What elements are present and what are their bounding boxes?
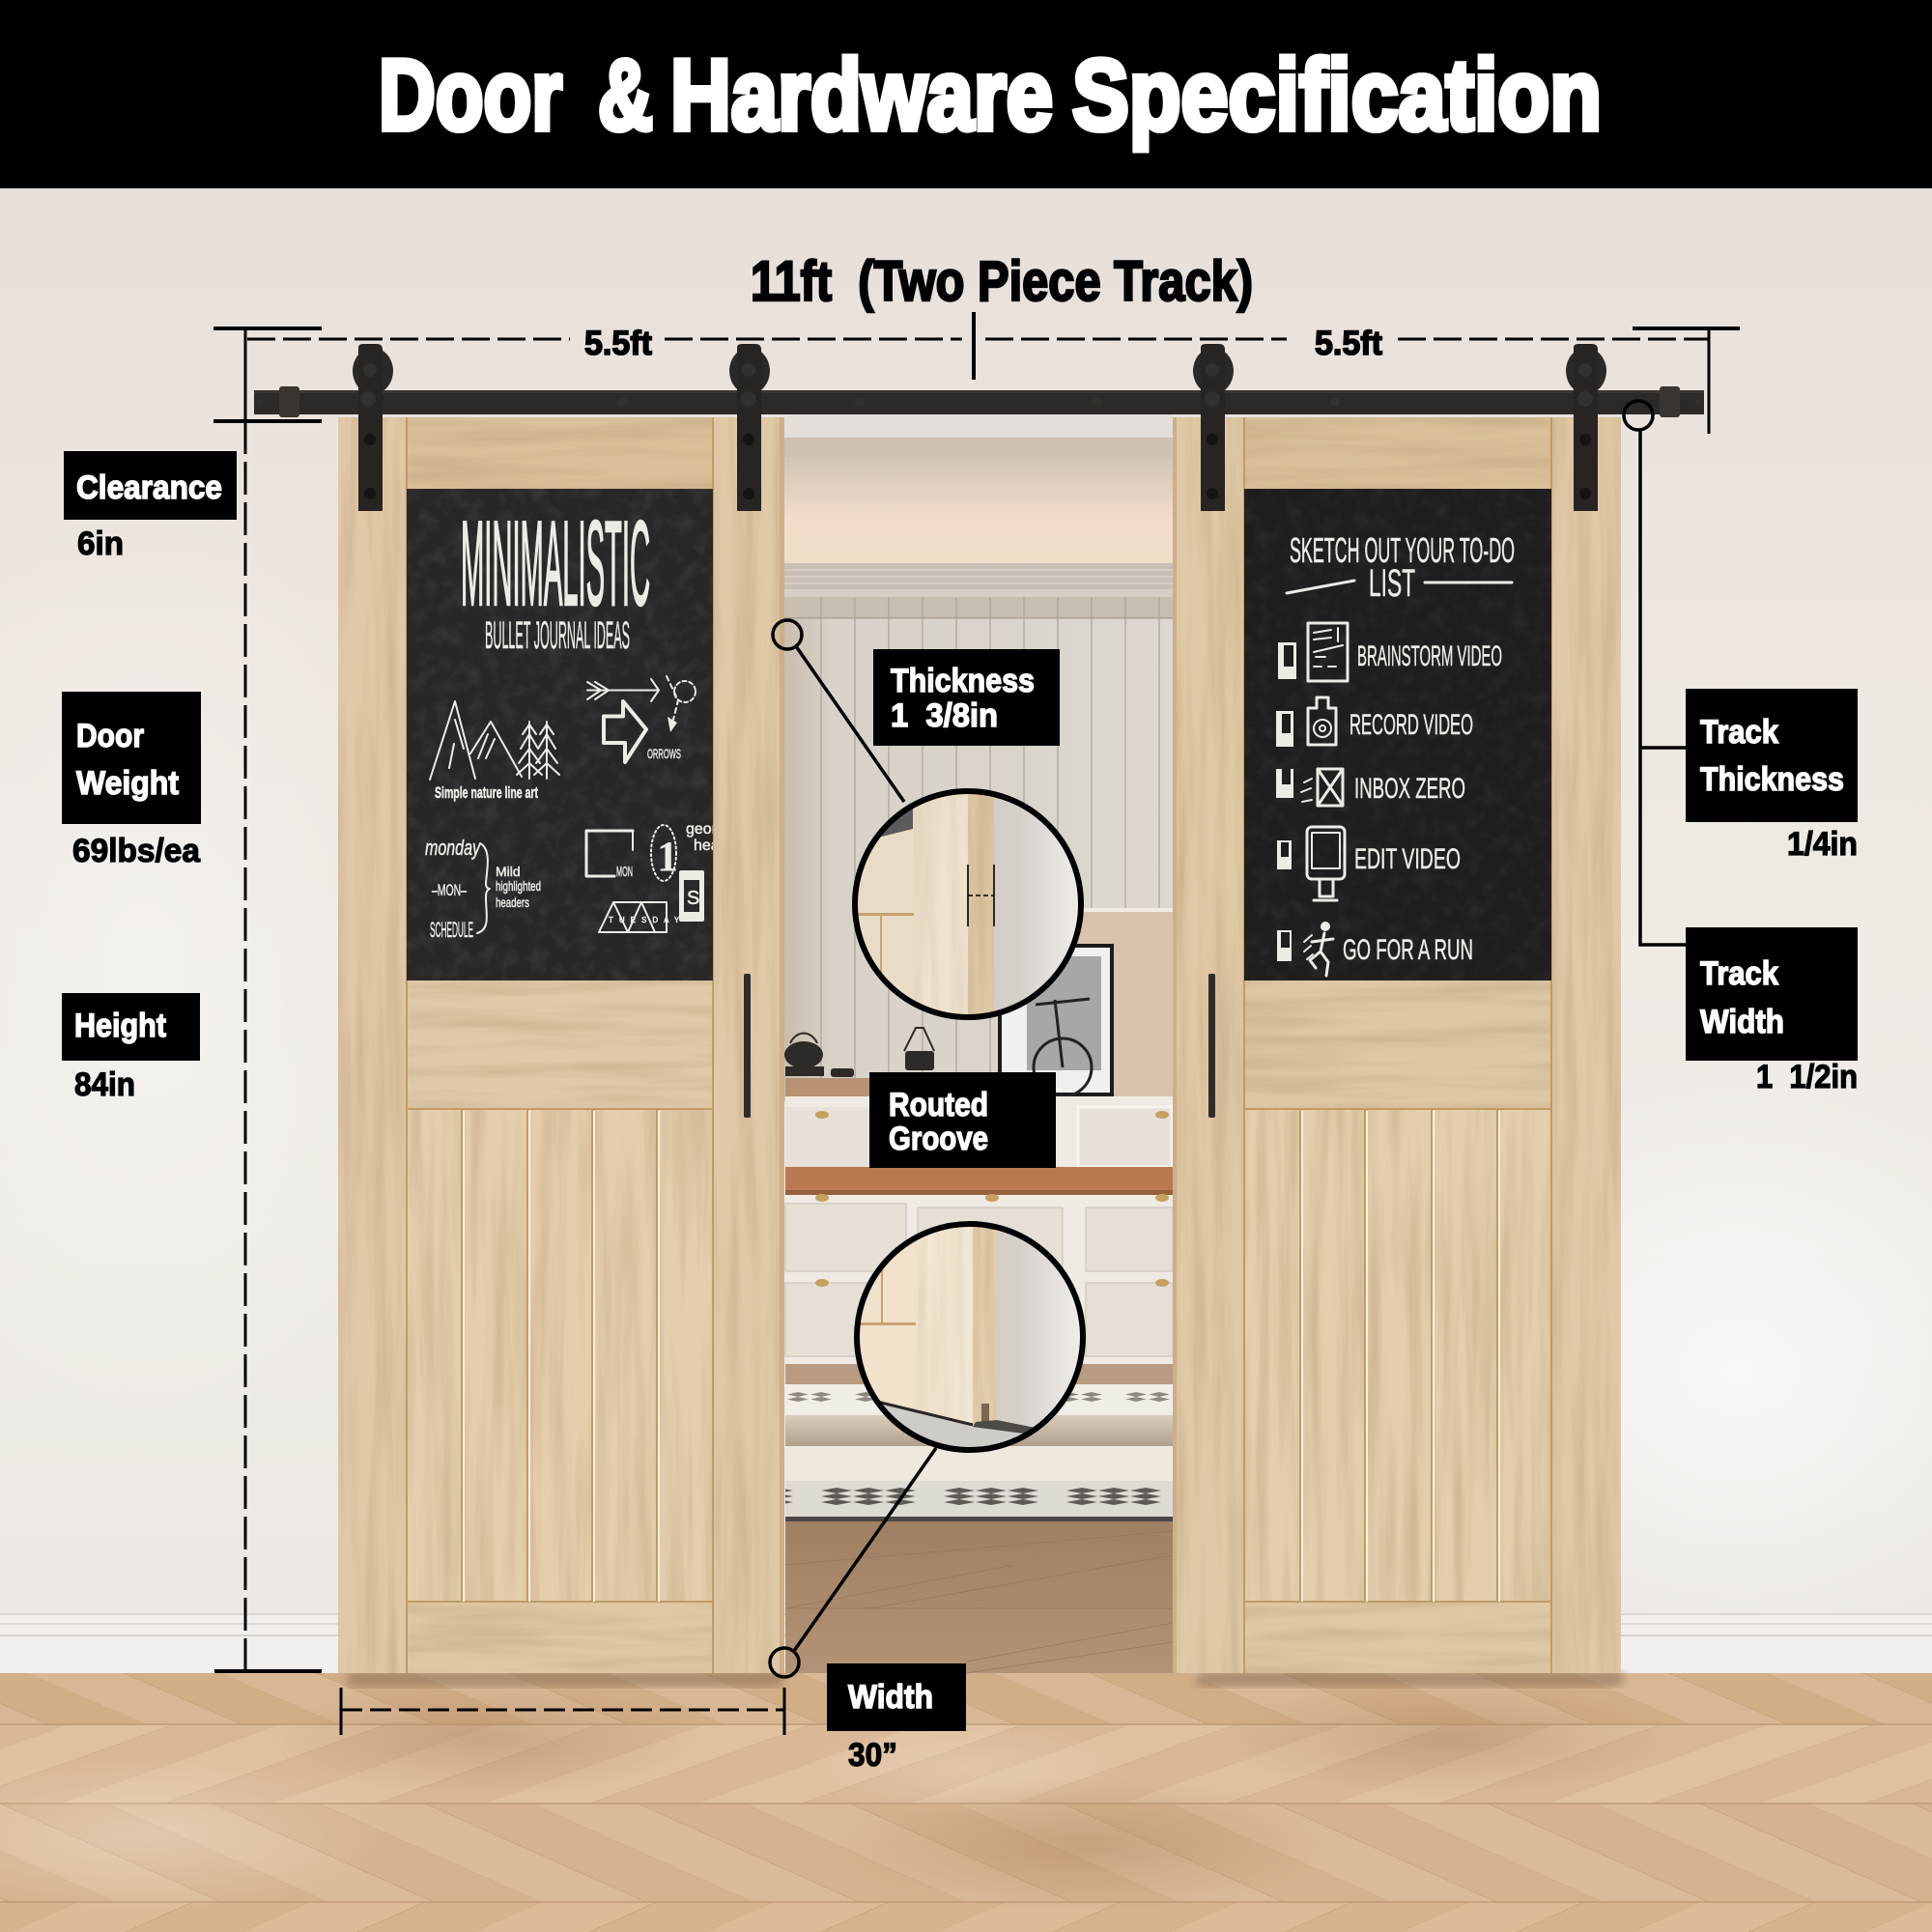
leader line: thickness xyxy=(773,620,904,802)
hanger strap 1 xyxy=(353,344,393,511)
herringbone wood floor xyxy=(0,1671,1932,1932)
height value: 84in xyxy=(74,1066,135,1103)
chalk arrows xyxy=(587,676,696,762)
magnifier: routed groove xyxy=(850,1219,1092,1459)
door width dimension line xyxy=(341,1688,784,1735)
door weight label xyxy=(62,692,201,824)
left track section label: 5.5ft xyxy=(584,325,652,362)
thickness label: 1 3/8in xyxy=(891,697,998,734)
hanger strap 2 xyxy=(729,344,770,511)
chalk geometric headers xyxy=(585,824,713,933)
chalk schedule headers: monday xyxy=(425,836,481,860)
chalk mountains and trees: Simple nature line art xyxy=(435,783,538,802)
backsplash xyxy=(1075,909,1173,1097)
title: Specification xyxy=(1072,40,1602,152)
chalk schedule headers xyxy=(425,836,541,942)
thickness label: Thickness xyxy=(891,663,1035,699)
chalk geometric headers: MON xyxy=(616,864,633,880)
chalk schedule headers: headers xyxy=(496,895,529,910)
clearance value: 6in xyxy=(77,526,124,562)
right chalkboard: SKETCH OUT YOUR TO-DO xyxy=(1290,530,1515,570)
chalk schedule headers: SCHEDULE xyxy=(430,918,473,942)
left door handle xyxy=(744,974,751,1118)
height label xyxy=(62,993,200,1061)
barn door track rail xyxy=(254,386,1704,417)
track length heading: 11ft (Two Piece Track) xyxy=(751,250,1253,313)
to-do row: inbox zero: INBOX ZERO xyxy=(1354,773,1465,805)
door weight label: Weight xyxy=(76,765,179,802)
title: Door xyxy=(379,40,562,152)
right door handle xyxy=(1208,974,1215,1118)
track thickness label: Track xyxy=(1700,714,1778,751)
track dimension lines xyxy=(213,312,1740,434)
width value: 30” xyxy=(848,1737,897,1774)
clearance label xyxy=(64,451,237,520)
chalk geometric headers: geome xyxy=(686,821,733,838)
track width label xyxy=(1686,927,1858,1061)
left chalkboard xyxy=(407,489,733,980)
to-do row: brainstorm video xyxy=(1278,623,1502,681)
left chalkboard: BULLET JOURNAL IDEAS xyxy=(485,614,630,657)
right barn door xyxy=(1173,417,1621,1673)
right track section label: 5.5ft xyxy=(1315,325,1382,362)
to-do row: edit video: EDIT VIDEO xyxy=(1354,843,1461,875)
track thickness value: 1/4in xyxy=(1787,826,1858,863)
room floor xyxy=(785,1521,1173,1673)
to-do row: go for a run xyxy=(1277,922,1473,976)
track thickness label: Thickness xyxy=(1700,761,1844,798)
baseboard xyxy=(0,1613,1932,1673)
to-do row: go for a run: GO FOR A RUN xyxy=(1343,934,1473,966)
door height dimension line xyxy=(214,421,322,1671)
door weight label: Door xyxy=(76,718,144,754)
chalk schedule headers: –MON– xyxy=(432,881,467,899)
chalk arrows: ORROWS xyxy=(647,746,681,761)
to-do row: record video xyxy=(1276,697,1473,747)
title: & xyxy=(598,40,653,152)
track width value: 1 1/2in xyxy=(1756,1059,1858,1095)
height label: Height xyxy=(74,1008,166,1044)
to-do row: inbox zero xyxy=(1276,769,1465,806)
track thickness label xyxy=(1686,689,1858,822)
left barn door xyxy=(338,417,784,1673)
to-do row: record video: RECORD VIDEO xyxy=(1350,709,1473,741)
clearance label: Clearance xyxy=(76,469,222,506)
header banner xyxy=(0,0,1932,188)
door weight value: 69lbs/ea xyxy=(72,833,201,869)
width label: Width xyxy=(848,1679,933,1716)
width label xyxy=(827,1663,966,1731)
rug xyxy=(785,1384,1173,1415)
routed groove label xyxy=(869,1072,1056,1168)
wall background xyxy=(0,188,1932,1676)
thickness label xyxy=(873,649,1060,746)
view through the door opening: kitchen xyxy=(784,413,1173,1673)
leader lines: track callouts xyxy=(1624,401,1686,945)
title xyxy=(379,40,1602,152)
magnifier: door thickness xyxy=(850,787,1092,1024)
framed bicycle print xyxy=(998,944,1114,1096)
track width label: Track xyxy=(1700,955,1778,992)
chalk geometric headers: S xyxy=(687,888,699,909)
hanger strap 3 xyxy=(1193,344,1234,511)
right chalkboard: LIST xyxy=(1369,562,1415,605)
chalk geometric headers: TUESDAY xyxy=(609,916,685,924)
teapots xyxy=(784,1028,934,1077)
leader line: routed groove xyxy=(770,1448,936,1677)
right chalkboard xyxy=(1244,489,1551,980)
routed groove label: Routed xyxy=(889,1087,988,1123)
chalk geometric headers: head xyxy=(694,838,728,854)
text: MINIMALISTIC xyxy=(461,497,650,631)
chalk mountains and trees xyxy=(430,701,559,802)
track width label: Width xyxy=(1700,1004,1784,1040)
to-do row: edit video xyxy=(1277,827,1461,900)
right chalkboard: BRAINSTORM VIDEO xyxy=(1357,640,1502,672)
shelf, cabinets, counter xyxy=(785,1078,872,1097)
chalk schedule headers: highlighted xyxy=(496,878,541,894)
hanger strap 4 xyxy=(1566,344,1606,511)
chalk geometric headers: 1 xyxy=(657,833,678,880)
chalk schedule headers: Mild xyxy=(496,864,521,879)
title: Hardware xyxy=(670,40,1053,152)
routed groove label: Groove xyxy=(889,1121,988,1157)
